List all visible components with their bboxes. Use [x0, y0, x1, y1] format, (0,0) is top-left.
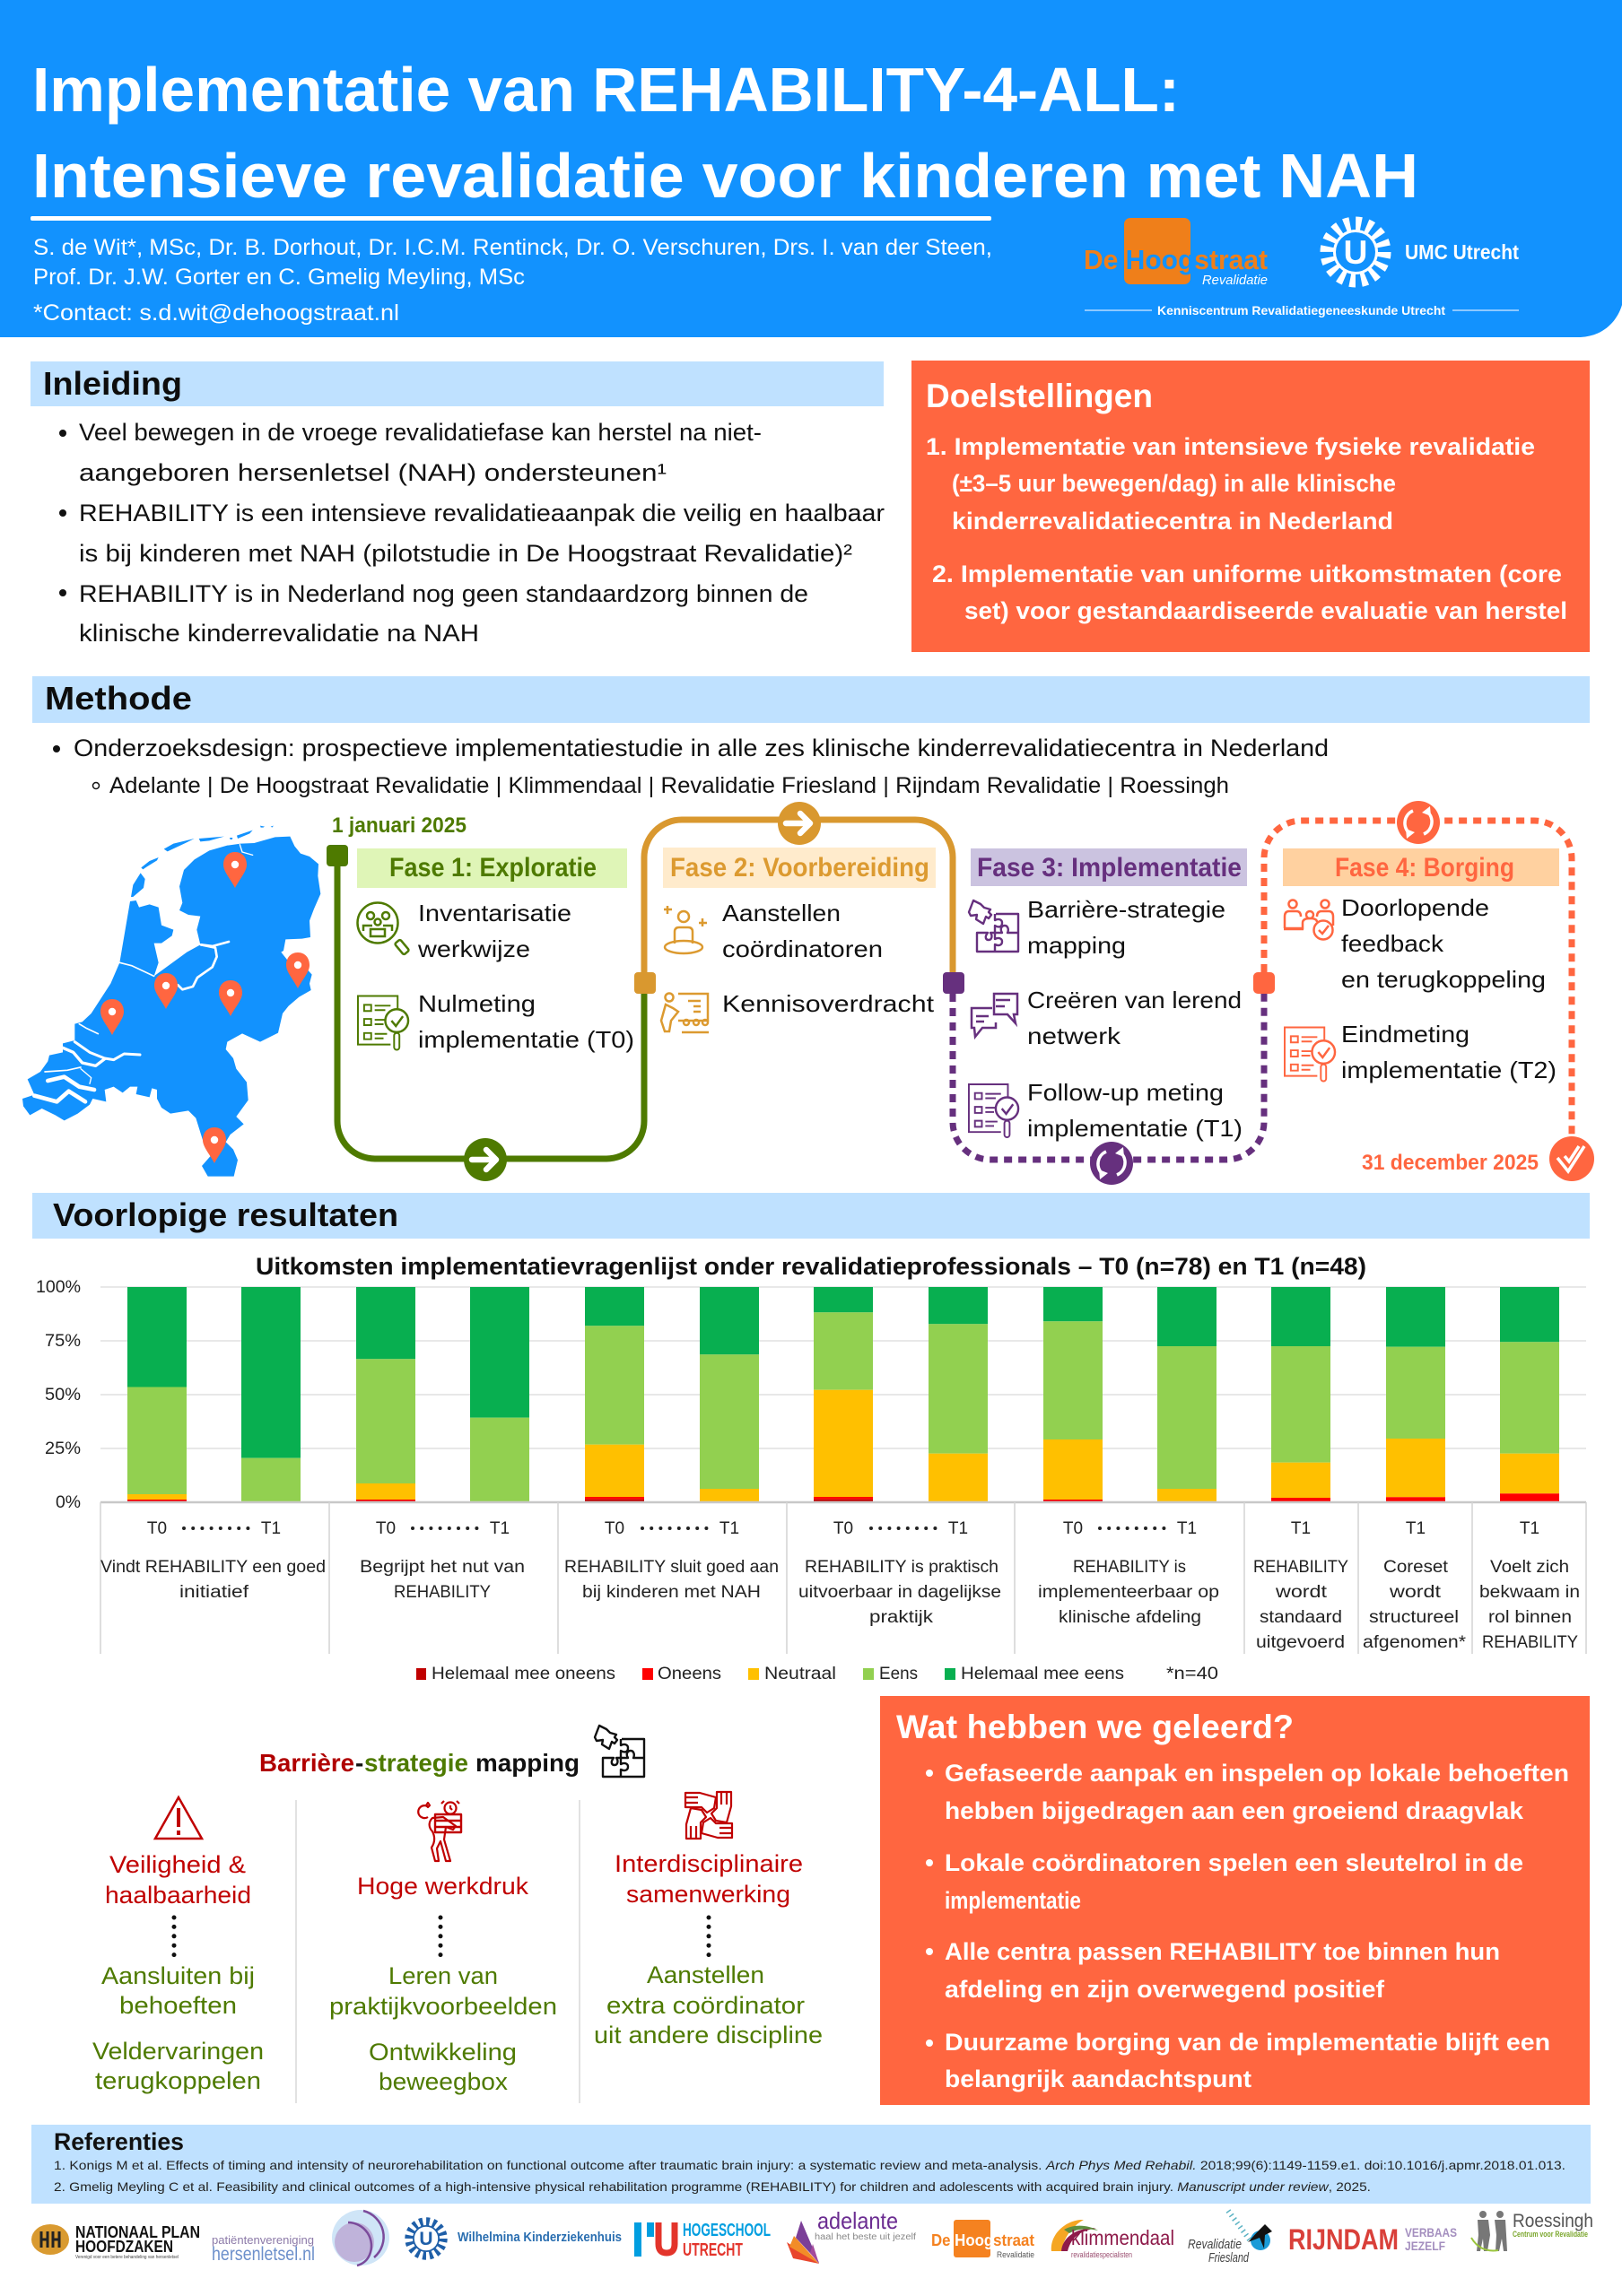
text: onderzoeksdesign: Onderzoeksdesign: prospectieve implementatiestudie in alle zes klinische kinderrevalidatiecentra in Nederland: [74, 735, 1329, 761]
icon: werkdruk: [418, 1801, 461, 1861]
logo: klimmendaal: [1051, 2220, 1174, 2259]
title: [32, 55, 1418, 211]
map: Nederland: [22, 826, 320, 1177]
logo: adelante: haal het beste uit jezelf: [815, 2232, 916, 2242]
icon: puzzel: [595, 1726, 644, 1777]
text: fase 1 items: [417, 900, 634, 1053]
icon: feedback: [1284, 900, 1333, 940]
category labels: implementeerbaar op: [1038, 1583, 1219, 1602]
text: fase 4 items: en terugkoppeling: [1341, 966, 1546, 993]
logo strip: [31, 2207, 1593, 2266]
y axis labels: 75%: [45, 1332, 81, 1351]
category labels: klinische afdeling: [1059, 1608, 1201, 1627]
logo: UMC Utrecht: UMC Utrecht: [1405, 240, 1519, 264]
phase 2: [661, 848, 936, 1032]
heading: doelstellingen: Doelstellingen: [926, 378, 1153, 414]
category labels: structureel: [1369, 1608, 1459, 1627]
icon: waarschuwing: [155, 1797, 202, 1839]
category labels: REHABILITY sluit goed aan: [564, 1558, 779, 1577]
column: samenwerking: Aanstellen: [647, 1961, 764, 1988]
path: fase 1: [327, 845, 644, 1181]
text: reference list: 1. Konigs M et al. Effects of timing and intensity of neurorehabilitation on functional outcome after traumatic brain injury: a systematic review and meta-analysis. Arch Phys Med Rehabil. 2018;99(6):1149-1159.e1. doi:10.1016/j.apmr.2018.01.013.: [54, 2158, 1565, 2172]
path: fase 3: [943, 972, 1264, 1185]
T0 T1 axis labels: T1: [1177, 1519, 1197, 1538]
y axis labels: 25%: [45, 1439, 81, 1458]
bullets: lessen: implementatie: [945, 1887, 1081, 1914]
text: fase 2 items: Kennisoverdracht: [722, 990, 935, 1017]
heading: barriere-strategie mapping: -: [355, 1749, 363, 1777]
path: fase 2: [634, 802, 953, 994]
kenniscentrum: Kenniscentrum Revalidatiegeneeskunde Utrecht: [1157, 303, 1445, 317]
bullets: inleiding: klinische kinderrevalidatie na NAH: [79, 620, 479, 647]
bullets: lessen: Gefaseerde aanpak en inspelen op lokale behoeften: [945, 1760, 1569, 1787]
bullets: lessen: afdeling en zijn overwegend positief: [945, 1976, 1385, 2003]
category labels: REHABILITY: [1253, 1558, 1348, 1577]
text: fase 3 items: Follow-up meting: [1027, 1079, 1224, 1106]
category labels: [100, 1558, 1580, 1652]
text: fase 1 items: werkwijze: [417, 935, 530, 962]
T0 T1 axis labels: [147, 1519, 1539, 1538]
bullets: lessen: belangrijk aandachtspunt: [945, 2066, 1251, 2092]
text: fase 1 items: Inventarisatie: [418, 900, 571, 926]
y axis labels: 50%: [45, 1386, 81, 1405]
column: samenwerking: uit andere discipline: [594, 2022, 823, 2048]
heading: barriere-strategie mapping: mapping: [475, 1749, 580, 1777]
bullets: lessen: hebben bijgedragen aan een groeiend draagvlak: [945, 1797, 1524, 1824]
list: doelstellingen: kinderrevalidatiecentra in Nederland: [952, 508, 1393, 535]
text: fase 4 items: [1341, 894, 1557, 1083]
legend: Helemaal mee oneens: [432, 1665, 615, 1683]
logo: nationaal plan hoofdzaken: Verenigd voor een betere behandeling van hersenletsel: [75, 2255, 179, 2260]
icon: nulmeting: [358, 996, 408, 1049]
T0 T1 axis labels: T0: [1063, 1519, 1083, 1538]
panel: inleiding: [31, 361, 885, 647]
logo: adelante: adelante: [817, 2207, 898, 2234]
heading: barriere-strategie mapping: Barrière: [259, 1749, 354, 1777]
category labels: rol binnen: [1488, 1608, 1572, 1627]
column: werkdruk: Hoge werkdruk: [357, 1873, 529, 1900]
column: werkdruk: beweegbox: [379, 2068, 509, 2095]
category labels: wordt: [1275, 1583, 1328, 1602]
y axis labels: 100%: [36, 1278, 81, 1297]
heading: barriere-strategie mapping: strategie: [364, 1749, 468, 1777]
column: werkdruk: [329, 1801, 557, 2095]
bullets: inleiding: REHABILITY is een intensieve revalidatieaanpak die veilig en haalbaar: [79, 500, 885, 526]
category labels: REHABILITY: [394, 1583, 491, 1602]
logo: roessingh: Centrum voor Revalidatie: [1513, 2230, 1588, 2239]
logo: klimmendaal: revalidatiespecialisten: [1071, 2250, 1132, 2259]
bullets: lessen: Lokale coördinatoren spelen een sleutelrol in de: [945, 1849, 1523, 1876]
column: werkdruk: Leren van: [388, 1962, 498, 1989]
category labels: wordt: [1389, 1583, 1442, 1602]
logo: de hoogstraat: De Hoogstraat: [931, 2231, 1034, 2249]
logo: de hoogstraat: [931, 2220, 1034, 2259]
icon: follow-up: [969, 1084, 1018, 1137]
logo: nationaal plan hoofdzaken: HOOFDZAKEN: [75, 2238, 173, 2256]
phase 3: [969, 848, 1247, 1142]
list: doelstellingen: (±3–5 uur bewegen/dag) in alle klinische: [952, 470, 1396, 497]
T0 T1 axis labels: T1: [1520, 1519, 1539, 1538]
panel: barriere-strategie mapping: [92, 1726, 823, 2103]
logo: rijndam: JEZELF: [1405, 2239, 1445, 2253]
path: fase 4: [1253, 801, 1594, 1181]
start date: 1 januari 2025: [332, 813, 467, 838]
text: fase 3 items: netwerk: [1027, 1022, 1121, 1049]
T0 T1 axis labels: T1: [948, 1519, 968, 1538]
column: veiligheid: Aansluiten bij: [101, 1962, 255, 1989]
category labels: Vindt REHABILITY een goed: [100, 1558, 326, 1577]
logo: nationaal plan hoofdzaken: NATIONAAL PLAN: [75, 2223, 200, 2241]
icon: locatie spelden: [100, 852, 310, 1163]
logo: rijndam: RIJNDAM: [1288, 2223, 1399, 2256]
logo: hogeschool utrecht: UTRECHT: [683, 2240, 743, 2260]
category labels: REHABILITY is praktisch: [805, 1558, 998, 1577]
phase 4: Fase 4: Borging: [1335, 853, 1514, 883]
column: veiligheid: terugkoppelen: [95, 2067, 261, 2094]
logo: brain: [332, 2210, 389, 2266]
T0 T1 axis labels: T0: [833, 1519, 853, 1538]
bullets: lessen: [926, 1760, 1569, 2092]
legend: [416, 1665, 1218, 1683]
logo: adelante: [787, 2207, 916, 2264]
authors: Prof. Dr. J.W. Gorter en C. Gmelig Meyling, MSc: [33, 265, 525, 290]
list: doelstellingen: 1. Implementatie van intensieve fysieke revalidatie: [926, 433, 1535, 460]
logo: wilhelmina kinderziekenhuis: U: [419, 2229, 433, 2249]
T0 T1 axis labels: T1: [490, 1519, 510, 1538]
text: fase 1 items: implementatie (T0): [418, 1026, 634, 1053]
category labels: standaard: [1260, 1608, 1342, 1627]
icon: eindmeting: [1285, 1028, 1335, 1081]
list: doelstellingen: [926, 433, 1567, 624]
end date: 31 december 2025: [1362, 1151, 1539, 1175]
legend: Eens: [879, 1665, 918, 1683]
panel: methode heading: Methode: [45, 680, 192, 717]
bullets: inleiding: aangeboren hersenletsel (NAH) ondersteunen¹: [79, 459, 667, 486]
icon: handen: [685, 1792, 732, 1839]
T0 T1 axis labels: T1: [719, 1519, 739, 1538]
text: onderzoeksdesign: [53, 735, 1329, 798]
column: werkdruk: praktijkvoorbeelden: [329, 1993, 557, 2020]
heading: inleiding: Inleiding: [43, 365, 182, 402]
column: samenwerking: [594, 1792, 823, 2048]
text: fase 4 items: implementatie (T2): [1341, 1057, 1557, 1083]
bullets: lessen: Duurzame borging van de implementatie blijft een: [945, 2029, 1550, 2056]
icon: kennisoverdracht: [661, 994, 709, 1032]
logo: hogeschool utrecht: HOGESCHOOL: [683, 2221, 771, 2240]
text: reference list: 2. Gmelig Meyling C et al. Feasibility and clinical outcomes of a high-intensive physical rehabilitation programme (REHABILITY) for children and adolescents with acquired brain injury. Manuscript under review , 2025.: [54, 2179, 1371, 2194]
panel: voorlopige resultaten heading: Voorlopige resultaten: [53, 1196, 398, 1233]
column: werkdruk: Ontwikkeling: [369, 2039, 517, 2066]
text: fase 4 items: feedback: [1341, 930, 1444, 957]
phase 3: Fase 3: Implementatie: [977, 853, 1242, 883]
panel: wat hebben we geleerd: [880, 1696, 1590, 2105]
logo: roessingh: [1471, 2211, 1593, 2251]
panel: doelstellingen: [911, 361, 1590, 652]
authors: S. de Wit*, MSc, Dr. B. Dorhout, Dr. I.C.M. Rentinck, Dr. O. Verschuren, Drs. I. van der Steen,: [33, 235, 992, 260]
icon: chat: [972, 994, 1017, 1037]
panel: referenties: [31, 2125, 1591, 2204]
category labels: uitvoerbaar in dagelijkse: [798, 1583, 1001, 1602]
legend: Neutraal: [764, 1665, 836, 1683]
logo: UMC Utrecht: [1327, 223, 1519, 281]
timeline: [327, 801, 1594, 1185]
text: reference list: [54, 2158, 1565, 2194]
text: fase 3 items: Creëren van lerend: [1027, 987, 1242, 1013]
T0 T1 axis labels: T1: [1291, 1519, 1311, 1538]
bullets: inleiding: is bij kinderen met NAH (pilotstudie in De Hoogstraat Revalidatie)²: [79, 540, 852, 567]
title: Implementatie van REHABILITY-4-ALL:: [32, 55, 1180, 125]
category labels: bij kinderen met NAH: [582, 1583, 761, 1602]
bullets: lessen: Alle centra passen REHABILITY toe binnen hun: [945, 1938, 1500, 1965]
logo: nationaal plan hoofdzaken: [31, 2223, 200, 2260]
logo: rijndam: VERBAAS: [1405, 2225, 1457, 2239]
logo: revalidatie friesland: [1188, 2211, 1272, 2266]
logo: De Hoogstraat: [1084, 218, 1268, 288]
icon: puzzel: [969, 900, 1018, 952]
logo: revalidatie friesland: Friesland: [1208, 2250, 1249, 2266]
column: veiligheid: haalbaarheid: [105, 1882, 251, 1909]
category labels: Voelt zich: [1490, 1558, 1569, 1577]
bar chart: [36, 1278, 1586, 1683]
logo: de hoogstraat: Revalidatie: [997, 2250, 1034, 2259]
column: samenwerking: samenwerking: [626, 1881, 790, 1908]
logo: klimmendaal: klimmendaal: [1071, 2226, 1174, 2249]
text: fase 3 items: Barrière-strategie: [1027, 896, 1225, 923]
chart title: Uitkomsten implementatievragenlijst onder revalidatieprofessionals – T0 (n=78) en T1 (n=48): [256, 1253, 1366, 1280]
bullets: inleiding: Veel bewegen in de vroege revalidatiefase kan herstel na niet-: [79, 419, 762, 446]
phase 1: [357, 848, 634, 1053]
category labels: REHABILITY: [1482, 1633, 1578, 1652]
text: fase 4 items: Doorlopende: [1341, 894, 1489, 921]
T0 T1 axis labels: T0: [376, 1519, 396, 1538]
bullets: inleiding: REHABILITY is in Nederland nog geen standaardzorg binnen de: [79, 580, 808, 607]
logo: De Hoogstraat: Revalidatie: [1202, 273, 1268, 288]
text: onderzoeksdesign: Adelante | De Hoogstraat Revalidatie | Klimmendaal | Revalidatie Friesland | Rijndam Revalidatie | Roessingh: [109, 773, 1229, 798]
icon: aanstellen: [664, 906, 707, 953]
column: veiligheid: [92, 1797, 264, 2094]
text: fase 4 items: Eindmeting: [1341, 1021, 1469, 1048]
list: doelstellingen: 2. Implementatie van uniforme uitkomstmaten (core: [932, 561, 1562, 587]
text: fase 3 items: mapping: [1027, 932, 1126, 959]
column: veiligheid: behoeften: [119, 1992, 237, 2019]
panel: methode heading: [32, 676, 1590, 723]
panel: referenties: Referenties: [54, 2128, 184, 2155]
logo: revalidatie friesland: Revalidatie: [1188, 2237, 1242, 2252]
logo: hersenletsel.nl: hersenletsel.nl: [212, 2244, 315, 2265]
authors: *Contact: s.d.wit@dehoogstraat.nl: [33, 300, 399, 326]
phase 1: Fase 1: Exploratie: [389, 853, 597, 883]
T0 T1 axis labels: T0: [605, 1519, 624, 1538]
logo: roessingh: Roessingh: [1513, 2211, 1593, 2231]
text: fase 1 items: Nulmeting: [418, 990, 536, 1017]
legend: Oneens: [658, 1665, 721, 1683]
text: fase 3 items: implementatie (T1): [1027, 1115, 1243, 1142]
column: samenwerking: extra coördinator: [606, 1992, 805, 2019]
T0 T1 axis labels: T1: [1406, 1519, 1426, 1538]
legend: Helemaal mee eens: [961, 1665, 1124, 1683]
category labels: uitgevoerd: [1256, 1633, 1345, 1652]
header banner: [0, 0, 1622, 337]
category labels: initiatief: [179, 1583, 249, 1602]
text: fase 3 items: [1027, 896, 1243, 1142]
category labels: Begrijpt het nut van: [360, 1558, 525, 1577]
heading: wat hebben we geleerd: Wat hebben we geleerd?: [896, 1709, 1294, 1745]
logo: UMC Utrecht: U: [1344, 234, 1367, 271]
text: fase 2 items: [722, 900, 935, 1017]
logo: hogeschool utrecht: [634, 2221, 771, 2260]
list: doelstellingen: set) voor gestandaardiseerde evaluatie van herstel: [964, 597, 1567, 624]
logo: wilhelmina kinderziekenhuis: Wilhelmina Kinderziekenhuis: [458, 2230, 622, 2245]
column: veiligheid: Veiligheid &: [109, 1851, 246, 1878]
authors: [33, 235, 992, 326]
column: veiligheid: Veldervaringen: [92, 2038, 264, 2065]
logo: De Hoogstraat: De Hoogstraat: [1084, 244, 1268, 275]
T0 T1 axis labels: T0: [147, 1519, 167, 1538]
category labels: praktijk: [869, 1608, 934, 1627]
phase 2: Fase 2: Voorbereiding: [670, 853, 929, 883]
category labels: REHABILITY is: [1073, 1558, 1186, 1577]
bullets: inleiding: [59, 419, 885, 647]
category labels: afgenomen*: [1363, 1633, 1467, 1652]
y axis labels: 0%: [56, 1493, 81, 1512]
category labels: bekwaam in: [1479, 1583, 1580, 1602]
panel: voorlopige resultaten heading: [32, 1193, 1590, 1239]
bars: [127, 1287, 1559, 1502]
logo: hersenletsel.nl: patiëntenvereniging: [212, 2233, 314, 2247]
column: samenwerking: Interdisciplinaire: [615, 1850, 803, 1877]
logo: wilhelmina kinderziekenhuis: [409, 2222, 622, 2256]
category labels: Coreset: [1383, 1558, 1449, 1577]
logo: hersenletsel.nl: [212, 2233, 315, 2265]
T0 T1 axis labels: T1: [261, 1519, 281, 1538]
title: Intensieve revalidatie voor kinderen met NAH: [32, 141, 1418, 211]
icon: inventarisatie: [357, 902, 409, 955]
phase 4: [1283, 848, 1559, 1083]
text: fase 2 items: coördinatoren: [722, 935, 883, 962]
y axis labels: [36, 1278, 81, 1512]
legend: *n=40: [1166, 1665, 1218, 1683]
text: fase 2 items: Aanstellen: [722, 900, 841, 926]
